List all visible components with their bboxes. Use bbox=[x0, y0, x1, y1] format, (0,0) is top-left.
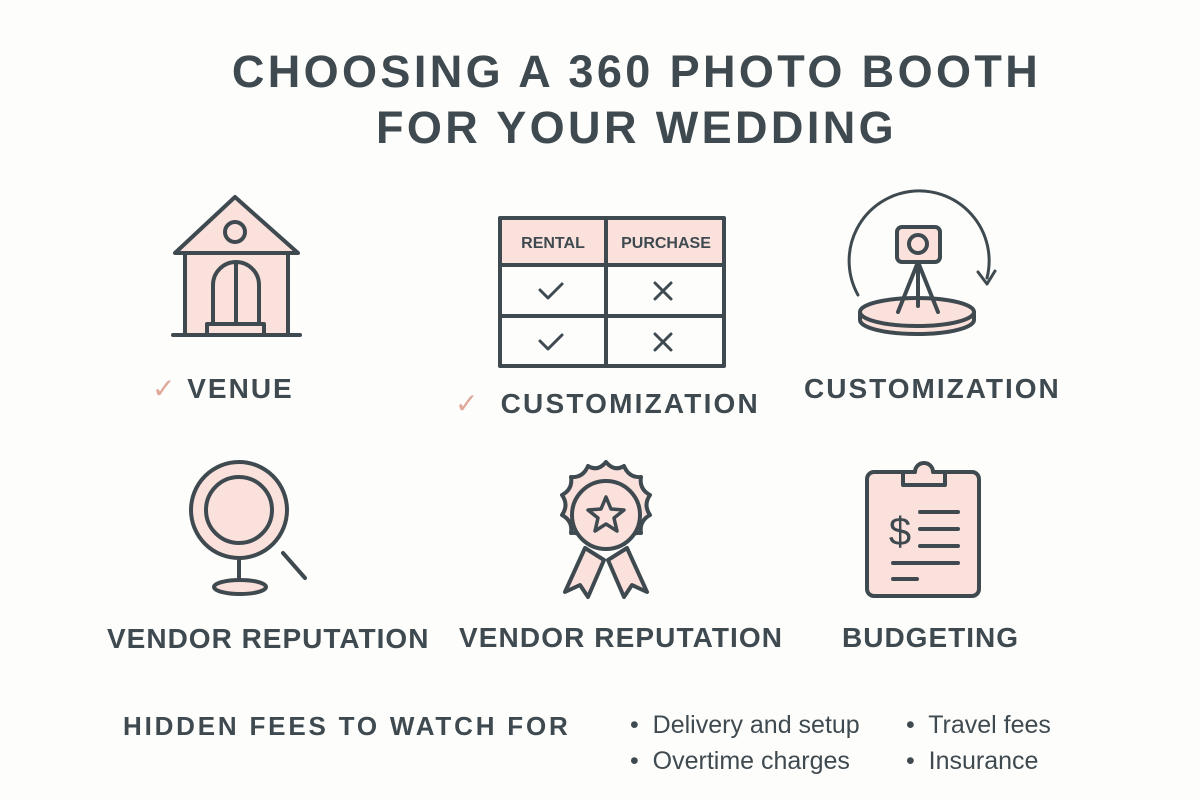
label: venue: ✓ VENUE bbox=[152, 373, 294, 404]
icon: mirror magnifier bbox=[191, 462, 305, 594]
heading: hidden fees: HIDDEN FEES TO WATCH FOR bbox=[123, 711, 571, 741]
list: hidden fees: • Insurance bbox=[906, 747, 1038, 775]
icon: rental vs purchase table: RENTAL bbox=[521, 235, 585, 252]
label: customization (camera): CUSTOMIZATION bbox=[804, 373, 1061, 404]
title: CHOOSING A 360 PHOTO BOOTH bbox=[232, 46, 1041, 97]
icon: 360 camera bbox=[849, 191, 995, 334]
label: vendor reputation 1: VENDOR REPUTATION bbox=[107, 623, 429, 654]
icon: budget clipboard bbox=[867, 463, 979, 596]
list: hidden fees bbox=[630, 711, 1051, 775]
label: budgeting: BUDGETING bbox=[842, 622, 1019, 653]
icon: budget clipboard: $ bbox=[889, 510, 911, 554]
label: customization (table): ✓ CUSTOMIZATION bbox=[455, 388, 760, 419]
list: hidden fees: • Overtime charges bbox=[630, 747, 850, 775]
title bbox=[232, 46, 1041, 153]
icon: venue house bbox=[173, 197, 300, 335]
icon: rental vs purchase table bbox=[500, 218, 724, 366]
icon: award rosette bbox=[562, 462, 650, 597]
list: hidden fees: • Travel fees bbox=[906, 711, 1051, 739]
label: vendor reputation 2: VENDOR REPUTATION bbox=[459, 622, 783, 653]
title: FOR YOUR WEDDING bbox=[376, 102, 897, 153]
icon: rental vs purchase table: PURCHASE bbox=[621, 235, 711, 252]
list: hidden fees: • Delivery and setup bbox=[630, 711, 860, 739]
